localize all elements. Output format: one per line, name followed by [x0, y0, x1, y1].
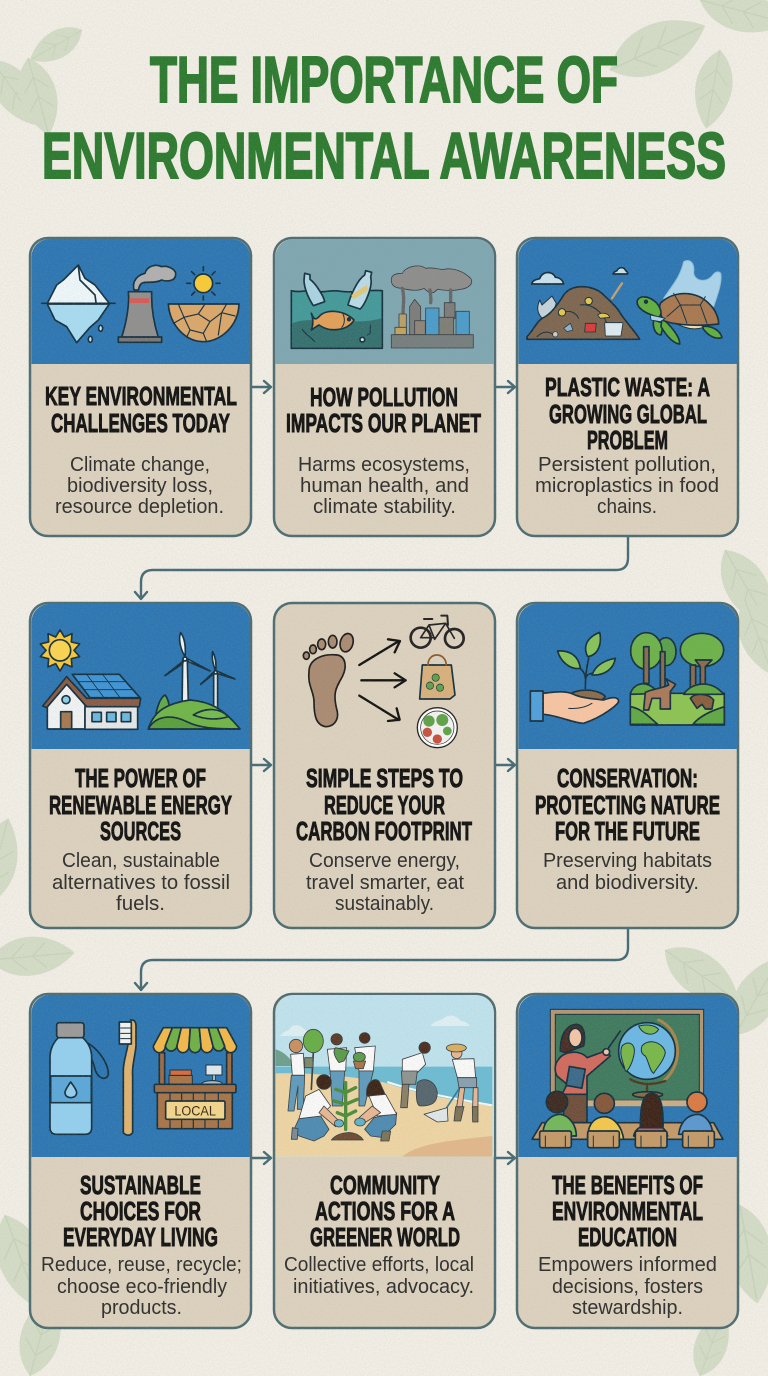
- panel: carbon footprint: [274, 603, 495, 928]
- heading: CHALLENGES TODAY: [51, 408, 230, 438]
- description: stewardship.: [572, 1297, 683, 1319]
- description: [538, 1254, 717, 1319]
- title: [42, 43, 726, 192]
- description: Preserving habitats: [543, 850, 712, 872]
- description: decisions, fosters: [552, 1276, 703, 1298]
- heading: [535, 763, 720, 846]
- arrow: card 8 to card 9: [496, 1152, 515, 1164]
- icon: local market stall: [153, 1028, 237, 1129]
- panel: plastic waste: [517, 238, 738, 536]
- icon: iceberg: [42, 265, 115, 343]
- description: [41, 1254, 242, 1319]
- icon: clouds: [532, 268, 628, 284]
- icon: smoggy city: [391, 266, 473, 348]
- heading: SIMPLE STEPS TO: [306, 763, 463, 793]
- heading: [49, 763, 232, 846]
- volunteers: [288, 1029, 478, 1141]
- description: Climate change,: [70, 454, 210, 476]
- panel: conservation: [517, 603, 738, 928]
- panel: pollution: [274, 238, 495, 536]
- description: [284, 1254, 474, 1298]
- icon: arrows: [359, 639, 406, 721]
- arrow: card 1 to card 2: [252, 381, 271, 393]
- heading: [310, 1170, 460, 1252]
- description: microplastics in food: [535, 475, 719, 497]
- heading: RENEWABLE ENERGY: [49, 790, 232, 820]
- panel: community actions: [274, 994, 495, 1328]
- icon: house with solar panels: [43, 674, 141, 729]
- heading: [552, 1170, 703, 1252]
- arrow: card 7 to card 8: [252, 1152, 271, 1164]
- heading: IMPACTS OUR PLANET: [286, 408, 481, 438]
- heading: EDUCATION: [578, 1222, 677, 1252]
- heading: [45, 381, 237, 438]
- description: initiatives, advocacy.: [293, 1276, 474, 1298]
- description: Empowers informed: [538, 1254, 717, 1276]
- description: human health, and: [300, 475, 469, 497]
- description: fuels.: [116, 893, 165, 915]
- description: Clean, sustainable: [62, 850, 220, 872]
- heading: [296, 763, 472, 846]
- description: climate stability.: [313, 496, 456, 518]
- heading: [545, 372, 710, 455]
- panel: sustainable choices: [30, 994, 251, 1328]
- arrow: row 1 to row 2: [135, 537, 628, 599]
- icon: bicycle: [411, 616, 464, 648]
- description: [306, 850, 464, 915]
- icon: hand holding seedling: [530, 632, 619, 723]
- description: sustainably.: [335, 893, 434, 915]
- heading: KEY ENVIRONMENTAL: [45, 381, 237, 411]
- description: products.: [101, 1297, 182, 1319]
- description: Persistent pollution,: [538, 454, 716, 476]
- heading: ACTIONS FOR A: [315, 1196, 455, 1226]
- description: Reduce, reuse, recycle;: [41, 1254, 242, 1276]
- icon: salad plate: [417, 708, 457, 748]
- arrow: card 5 to card 6: [496, 759, 515, 771]
- heading: [286, 382, 481, 438]
- heading: CARBON FOOTPRINT: [296, 816, 472, 846]
- icon: footprint: [303, 632, 355, 727]
- description: biodiversity loss,: [67, 475, 213, 497]
- description: [543, 850, 712, 894]
- icon: teacher: [555, 1024, 620, 1123]
- icon: plastic bag and turtle: [637, 260, 722, 344]
- icon: smokestack: [118, 265, 176, 342]
- icon: shopping bag: [420, 655, 455, 699]
- arrow: card 2 to card 3: [496, 381, 515, 393]
- description: Collective efforts, local: [284, 1254, 474, 1276]
- icon: garbage heap: [527, 283, 640, 339]
- panel: renewable energy: [30, 603, 251, 928]
- description: [55, 454, 224, 518]
- heading: GREENER WORLD: [310, 1222, 460, 1252]
- description: Harms ecosystems,: [298, 454, 470, 476]
- heading: SOURCES: [100, 816, 181, 846]
- icon: reusable water bottle: [50, 1023, 108, 1134]
- arrow: row 2 to row 3: [135, 929, 628, 990]
- heading: SUSTAINABLE: [80, 1170, 201, 1200]
- icon: forest with deer and bear: [630, 633, 724, 725]
- heading: HOW POLLUTION: [310, 382, 458, 412]
- heading: COMMUNITY: [330, 1170, 440, 1200]
- arrow: card 4 to card 5: [252, 759, 271, 771]
- heading: CONSERVATION:: [557, 763, 698, 793]
- icon: polluted water: [291, 271, 382, 348]
- description: [52, 850, 230, 915]
- beach scene: [276, 1016, 492, 1157]
- icon: students at desks: [532, 1091, 723, 1148]
- heading: PROBLEM: [587, 425, 668, 455]
- icon: bamboo toothbrush: [119, 1020, 136, 1135]
- description: travel smarter, eat: [306, 872, 464, 894]
- heading: [63, 1170, 218, 1252]
- description: resource depletion.: [55, 496, 224, 518]
- description: chains.: [597, 496, 657, 518]
- heading: CHOICES FOR: [80, 1196, 201, 1226]
- description: choose eco-friendly: [57, 1276, 227, 1298]
- description: [535, 454, 719, 518]
- description: alternatives to fossil: [52, 872, 230, 894]
- icon: chalkboard: [550, 1009, 704, 1106]
- icon: wind turbines on hills: [148, 633, 240, 729]
- panel: environmental education: [517, 994, 738, 1328]
- description: [298, 454, 470, 518]
- panel: key environmental challenges: [30, 238, 251, 536]
- icon: sun and cracked earth: [168, 267, 239, 342]
- heading: THE POWER OF: [75, 763, 206, 793]
- heading: EVERYDAY LIVING: [63, 1222, 218, 1252]
- icon: globe: [619, 1020, 678, 1098]
- icon: sun: [40, 630, 80, 671]
- heading: REDUCE YOUR: [324, 790, 445, 820]
- description: Conserve energy,: [309, 850, 460, 872]
- description: and biodiversity.: [556, 872, 699, 894]
- icon: local market stall: LOCAL: [174, 1102, 216, 1118]
